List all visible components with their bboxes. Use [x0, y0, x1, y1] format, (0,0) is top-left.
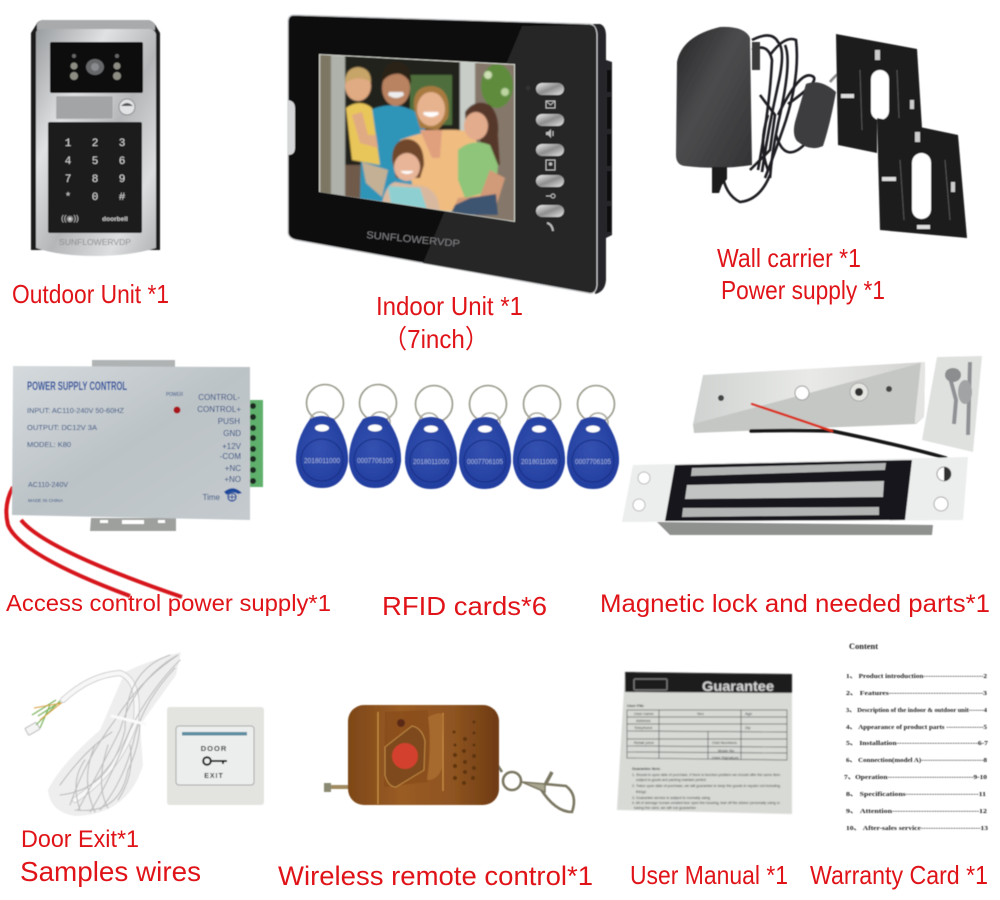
guarantee terms: 2. Twice upon date of purchase, we will guarantee to keep the goods in repairs not including — [632, 784, 780, 788]
keypad: 3 — [119, 138, 125, 150]
guarantee terms: Guarantee item: — [632, 767, 661, 771]
label: indoor unit: Indoor Unit *1 — [376, 291, 523, 321]
terminal labels: +12V — [222, 442, 242, 451]
brand mark: SUNFLOWERVDP — [59, 237, 131, 247]
enclosure spec text: INPUT: AC110-240V 50-60HZ — [27, 406, 124, 415]
label: magnetic lock: Magnetic lock and needed parts*1 — [600, 590, 990, 618]
contents list: 4、 Appearance of product parts ----------------5 — [846, 725, 987, 731]
photo: power adapter and wall carriers — [676, 27, 967, 238]
label: door exit and wires — [20, 826, 201, 887]
key fob 3 — [405, 386, 457, 489]
red wires — [6, 487, 182, 597]
contents title: Content — [849, 642, 878, 651]
photo: sample wire coil — [25, 652, 181, 816]
guarantee terms: 1. Should in upon date of purchase, if there is function problem we should offer the same item — [632, 773, 780, 777]
guarantee terms: things — [636, 790, 646, 794]
enclosure spec text: POWER — [166, 392, 183, 398]
contents list: 8、 Specifications----------------------------11 — [846, 792, 986, 798]
enclosure spec text: OUTPUT: DC12V 3A — [27, 423, 97, 432]
indicator LED — [397, 719, 405, 727]
woman — [400, 130, 490, 212]
outdoor unit housing — [31, 20, 160, 250]
guarantee terms: subject to goods and packing maintain perfect — [636, 778, 707, 782]
girl front — [392, 139, 424, 178]
key fob 4 — [459, 386, 511, 489]
key fob 4: 0007706105 — [467, 459, 503, 466]
photo: access control power supply — [6, 360, 263, 597]
guarantee terms: losing the card, we will not guarantee — [634, 806, 696, 810]
key fob 5: 2018011000 — [521, 459, 557, 466]
screen with family photo — [319, 50, 515, 225]
speaker dots — [452, 720, 476, 785]
adapter plug end — [712, 167, 727, 193]
keypad: doorbell — [102, 216, 128, 223]
photo: door exit button: EXIT — [204, 773, 224, 780]
key fob 2: 0007706105 — [357, 458, 393, 465]
wall carrier plate 1 — [836, 34, 922, 153]
enclosure spec text: MODEL: K80 — [27, 440, 71, 449]
label: indoor unit — [376, 291, 523, 354]
coil of cable — [48, 652, 181, 816]
terminal block — [250, 400, 263, 487]
user file table: User File — [627, 703, 645, 708]
mounting tabs — [92, 360, 175, 368]
label: RFID cards: RFID cards*6 — [382, 591, 547, 621]
contents list: 9、 Attention---------------------------------12 — [846, 809, 987, 815]
key icon — [203, 757, 227, 765]
photo: magnetic lock — [622, 356, 982, 535]
terminal labels: CONTROL- — [198, 393, 240, 402]
screw bag — [922, 356, 982, 452]
terminal labels: PUSH — [218, 417, 240, 426]
label: access control power supply: Access control power supply*1 — [6, 590, 331, 616]
enclosure spec text: AC110-240V — [28, 480, 68, 489]
keypad: * — [65, 192, 71, 204]
guarantee terms: 3. Guarantee service is subject to normally using — [632, 796, 710, 800]
user file table: Odd Numbers — [712, 740, 737, 745]
keypad: 8 — [92, 174, 98, 186]
enclosure spec text: MADE IN CHINA — [28, 498, 63, 503]
lock wires — [751, 404, 946, 458]
keypad: 5 — [92, 156, 98, 168]
label: wall carrier and power supply: Wall carrier *1 — [717, 243, 861, 273]
label: door exit and wires: Door Exit*1 — [21, 826, 139, 853]
photo: door exit button — [167, 707, 264, 805]
user file table: Address — [636, 718, 651, 723]
user file table: User Signature — [712, 755, 739, 760]
magnet body — [622, 457, 968, 535]
photo: wireless remote — [324, 705, 574, 812]
contents list: 1、 Product introduction-------------------------2 — [846, 674, 987, 680]
ferrite core — [794, 82, 836, 148]
terminal labels: +NO — [224, 475, 241, 484]
key fob 1: 2018011000 — [304, 458, 340, 465]
terminal labels — [197, 393, 242, 502]
keypad: 4 — [65, 156, 72, 168]
user file table: Retail price — [634, 740, 655, 745]
terminal labels: -COM — [220, 452, 241, 461]
keypad: ((◉)) — [61, 214, 79, 223]
keypad — [48, 122, 142, 233]
man — [360, 105, 425, 205]
antenna — [324, 783, 348, 792]
contents list — [844, 674, 988, 832]
call button — [119, 99, 135, 115]
key fob 6 — [567, 386, 619, 489]
terminal labels: Time — [203, 493, 221, 502]
monitor front — [288, 15, 597, 293]
monitor back edge — [590, 24, 612, 294]
time adjuster icon — [224, 488, 242, 501]
enclosure title: POWER SUPPLY CONTROL — [27, 379, 127, 393]
key ring and clasp — [491, 755, 574, 812]
terminal labels: GND — [223, 429, 241, 438]
label: indoor unit: （7inch） — [383, 324, 489, 354]
label: wall carrier and power supply: Power supply *1 — [721, 275, 885, 305]
contents list: 6、 Connection(model A)---------------------------8 — [846, 757, 987, 764]
warranty card contents page — [844, 642, 988, 832]
contents list: 7、Operation-----------------------------------9-10 — [844, 775, 987, 781]
remote body — [348, 705, 499, 805]
keypad: 7 — [65, 174, 71, 186]
photo: outdoor unit — [31, 20, 160, 256]
label: outdoor unit: Outdoor Unit *1 — [12, 279, 169, 309]
key fob 5 — [513, 386, 565, 489]
guarantee terms — [632, 767, 781, 810]
user file table: Zip — [745, 725, 751, 730]
keypad: 1 — [65, 138, 72, 150]
photo: RFID key fobs — [296, 384, 619, 489]
photo: door exit button: DOOR — [201, 744, 227, 753]
contents list: 5、 Installation--------------------------------6-7 — [846, 741, 988, 747]
girl right — [465, 103, 500, 165]
status LED — [526, 86, 530, 90]
label: wireless remote: Wireless remote control*1 — [278, 861, 593, 891]
contents list: 2、 Features------------------------------------3 — [846, 691, 987, 697]
button guard — [385, 726, 425, 787]
keypad: # — [119, 192, 126, 204]
user manual sheet — [617, 672, 792, 814]
cable connector — [25, 699, 65, 735]
enclosure — [12, 366, 250, 520]
camera window — [50, 42, 143, 93]
keypad: 9 — [119, 174, 125, 186]
cable bundle — [722, 35, 838, 202]
guarantee header — [625, 672, 792, 693]
label: door exit and wires: Samples wires — [20, 856, 201, 887]
contents list: 3、 Description of the indoor & outdoor unit-------4 — [846, 708, 987, 714]
side buttons and icons — [536, 83, 564, 231]
guarantee terms: 4. All of damage human-created tear open the housing, tear off the sticker personally using or — [632, 801, 781, 805]
key fob 1 — [296, 384, 348, 488]
power LED — [174, 406, 180, 414]
wall carrier plate 2 — [877, 118, 967, 238]
keypad: 6 — [119, 156, 125, 168]
key fob 3: 2018011000 — [413, 459, 449, 466]
pins — [752, 42, 760, 70]
label: wall carrier and power supply — [717, 243, 885, 305]
enclosure spec text — [27, 392, 183, 503]
label: user manual: User Manual *1 — [630, 860, 788, 890]
boy — [346, 103, 380, 165]
user file table: User name — [634, 711, 654, 716]
terminal labels: +NC — [225, 464, 241, 473]
speaker slot — [288, 100, 295, 155]
key fob 6: 0007706105 — [575, 459, 611, 466]
user file table: Age — [745, 711, 753, 716]
adapter body — [676, 27, 752, 168]
user manual sheet: Guarantee — [702, 678, 774, 694]
user file table: Sex — [697, 711, 704, 716]
keypad: 2 — [92, 138, 98, 150]
user file table: Mode No — [718, 748, 735, 753]
speaker grille — [56, 96, 113, 119]
terminal labels: CONTROL+ — [197, 405, 241, 414]
user file table — [627, 703, 787, 760]
user file table: Telephone — [634, 725, 653, 730]
key fob 2 — [349, 384, 401, 488]
photo: indoor unit — [288, 15, 612, 294]
armature plate — [693, 362, 925, 433]
contents list: 10、 After-sales service------------------------13 — [846, 826, 988, 832]
red button — [392, 743, 418, 769]
keypad: 0 — [92, 192, 98, 204]
monitor brand: SUNFLOWERVDP — [366, 230, 461, 250]
